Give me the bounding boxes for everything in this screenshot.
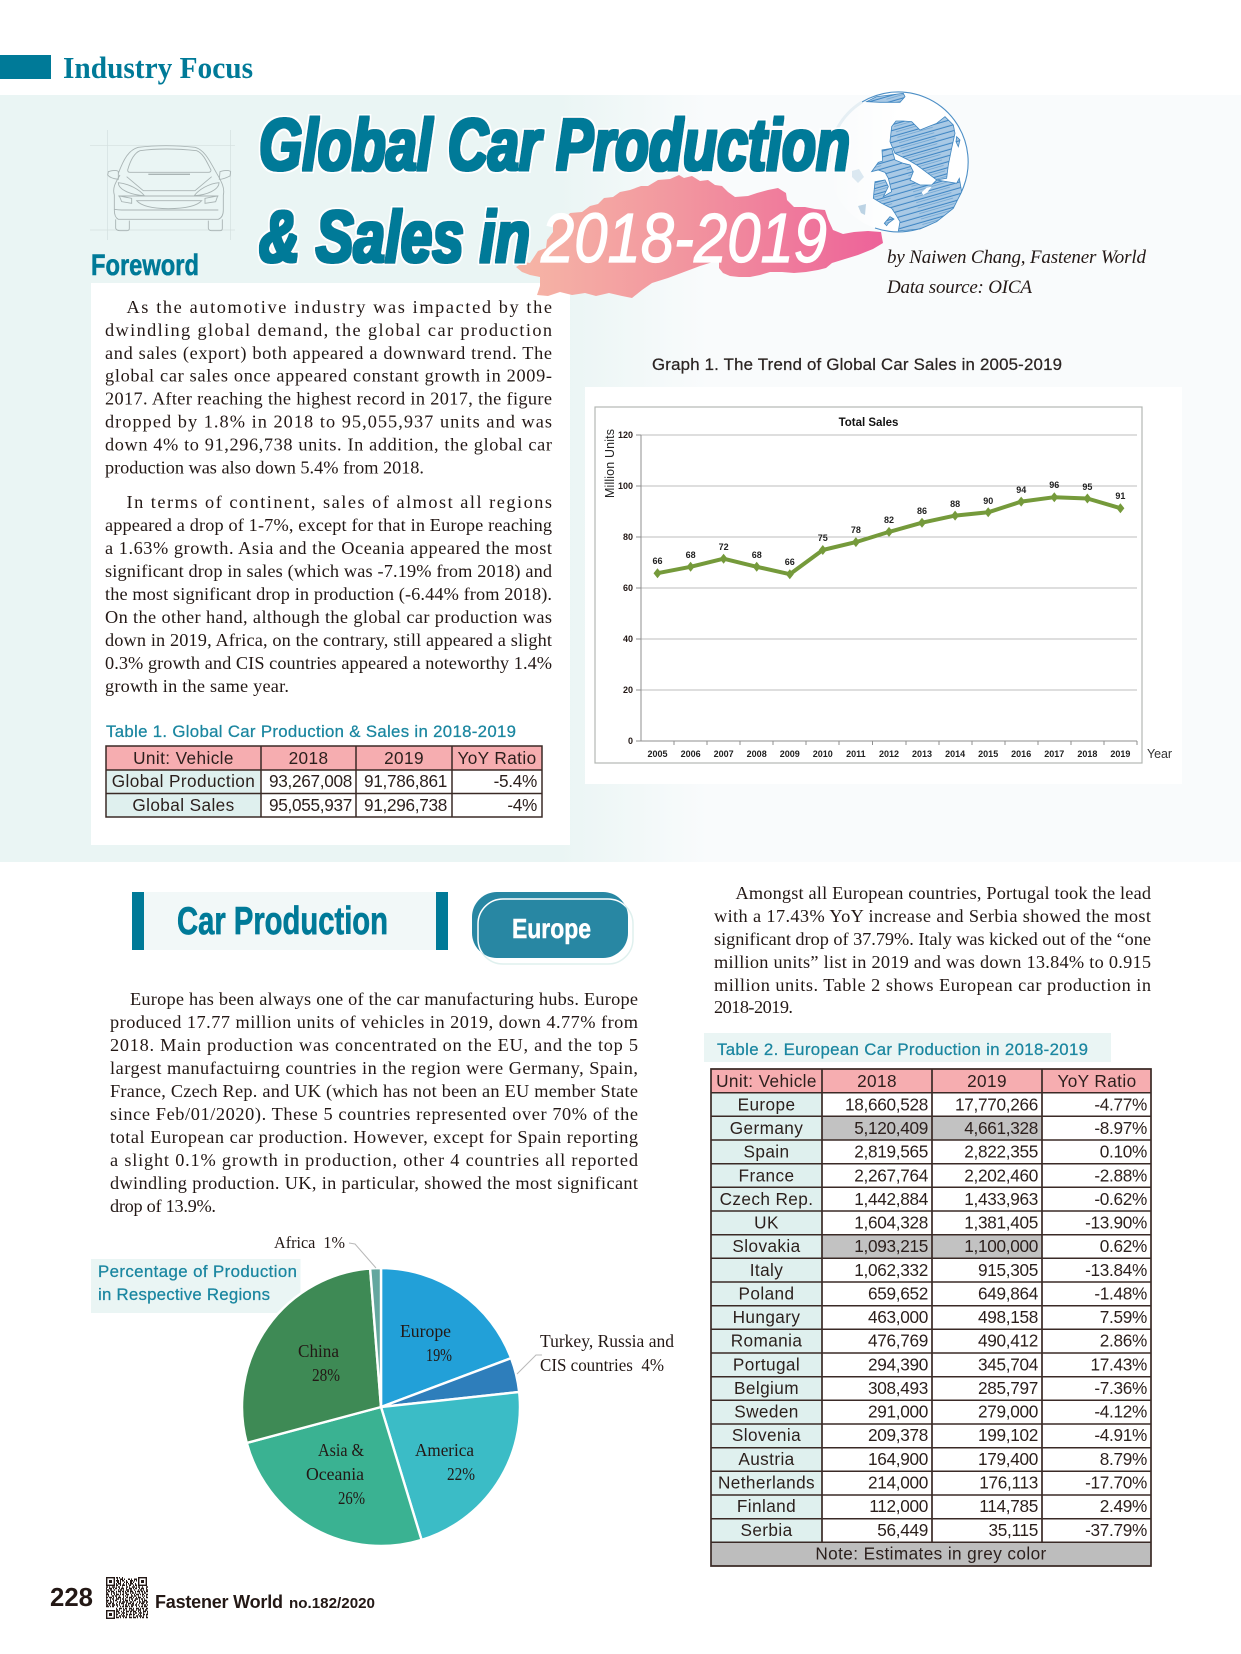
text block: foreword paragraph 1: production was also down 5.4% from 2018. xyxy=(105,457,424,477)
table 2 values: 1,100,000 xyxy=(964,1236,1038,1256)
brush stroke behind years xyxy=(516,175,883,298)
table 2 values: 214,000 xyxy=(868,1472,928,1492)
data labels: 75 xyxy=(818,533,828,543)
data labels: 78 xyxy=(851,525,861,535)
table 2 row labels: Belgium xyxy=(734,1378,799,1398)
table 2 values: -0.62% xyxy=(1094,1189,1147,1209)
table 2 row labels: Note: Estimates in grey color xyxy=(815,1544,1047,1564)
icon: car line drawing xyxy=(90,130,235,240)
x axis labels: 2012 xyxy=(879,749,899,759)
table 2 row labels: 2018 xyxy=(857,1071,897,1091)
table 2 row labels: 2019 xyxy=(967,1071,1007,1091)
slice: America xyxy=(381,1392,520,1540)
table 2 values: 199,102 xyxy=(978,1425,1038,1445)
table 1: 2018 xyxy=(289,748,328,768)
table 2 values: -4.12% xyxy=(1094,1402,1147,1422)
callout: Turkey, Russia and CIS: CIS countries 4% xyxy=(540,1355,664,1375)
table 2 values: 4,661,328 xyxy=(964,1118,1038,1138)
x axis labels: 2014 xyxy=(945,749,965,759)
table 2 row labels: Serbia xyxy=(740,1520,793,1540)
line chart: total sales xyxy=(595,407,1172,763)
slice: China xyxy=(242,1268,381,1443)
table 2 values: 498,158 xyxy=(978,1307,1038,1327)
table 2 values: -17.70% xyxy=(1085,1472,1147,1492)
pie labels: Asia & xyxy=(318,1440,364,1460)
table 2 values: 0.10% xyxy=(1100,1142,1147,1162)
table 2 row labels: Austria xyxy=(738,1449,795,1469)
x axis labels: 2006 xyxy=(681,749,701,759)
byline: Data source: OICA xyxy=(886,277,1032,298)
line chart: total sales: 80 xyxy=(623,532,633,542)
x axis labels xyxy=(647,749,1130,759)
table 1: Global Sales xyxy=(132,795,235,815)
heading: car production: Car Production xyxy=(177,900,388,943)
table 2 row labels xyxy=(716,1071,1137,1564)
callout: Turkey, Russia and CIS xyxy=(517,1331,674,1375)
table 2 values: 291,000 xyxy=(868,1402,928,1422)
byline xyxy=(886,247,1146,298)
pie chart caption: in Respective Regions xyxy=(98,1285,270,1304)
heading: car production xyxy=(132,892,448,950)
line chart: total sales: 40 xyxy=(623,634,633,644)
table 1: 93,267,008 xyxy=(269,771,352,791)
text block: Europe production: 2018. Main production was concentrated on the EU, and the top 5 xyxy=(110,1035,638,1055)
table 1: YoY Ratio xyxy=(457,748,537,768)
text block: Europe production: produced 17.77 million units of vehicles in 2019, down 4.77% from xyxy=(110,1012,638,1032)
table 2 values: 35,115 xyxy=(988,1520,1038,1540)
line chart: total sales: Total Sales xyxy=(839,417,898,429)
table 2 values: 114,785 xyxy=(979,1496,1038,1516)
pie labels: China xyxy=(298,1341,339,1361)
table 1: 2019 xyxy=(384,748,424,768)
table 2 caption: Table 2. European Car Production in 2018-2019 xyxy=(717,1040,1088,1059)
text block: Europe production: a slight 0.1% growth in production, other 4 countries all reported xyxy=(110,1150,638,1170)
table 2 row labels: YoY Ratio xyxy=(1057,1071,1137,1091)
table 2 values: 56,449 xyxy=(877,1520,928,1540)
data labels: 82 xyxy=(884,515,894,525)
table 2 values: 1,093,215 xyxy=(854,1236,928,1256)
text block: Europe production: Europe has been always one of the car manufacturing hubs. Europe xyxy=(130,989,638,1009)
table 2 row labels: UK xyxy=(754,1212,779,1232)
text block: foreword paragraph 2: down in 2019, Africa, on the contrary, still appeared a slight xyxy=(105,630,552,650)
table 1: 95,055,937 xyxy=(269,795,352,815)
table 2 row labels: Germany xyxy=(730,1118,803,1138)
line chart: total sales: 120 xyxy=(618,430,633,440)
text block: foreword paragraph 1: global car sales once appeared constant growth in 2009- xyxy=(105,366,552,386)
table 2 values: 2,819,565 xyxy=(854,1142,928,1162)
table 2 row labels: Sweden xyxy=(734,1402,799,1422)
pie chart: production by region xyxy=(242,1268,520,1546)
text block: European countries: significant drop of 37.79%. Italy was kicked out of the “one xyxy=(714,929,1151,949)
table 2 values: 2,202,460 xyxy=(964,1165,1038,1185)
table 2 row labels: Portugal xyxy=(733,1354,800,1374)
x axis labels: 2016 xyxy=(1011,749,1031,759)
table 2 values: 164,900 xyxy=(868,1449,928,1469)
text block: foreword paragraph 2: On the other hand, although the global car production was xyxy=(105,607,552,627)
data labels: 94 xyxy=(1016,485,1026,495)
title xyxy=(259,105,850,278)
text block: foreword paragraph 2: 0.3% growth and CIS countries appeared a noteworthy 1.4% xyxy=(105,653,552,673)
text block: foreword paragraph 2: the most significant drop in production (-6.44% from 2018). xyxy=(105,584,552,605)
data labels: 68 xyxy=(686,550,696,560)
text block: foreword paragraph 1: As the automotive industry was impacted by the xyxy=(126,297,552,317)
table 1: -5.4% xyxy=(494,771,537,791)
table 2 values: 112,000 xyxy=(869,1496,928,1516)
text block: foreword paragraph 1: 2017. After reaching the highest record in 2017, the figure xyxy=(105,389,552,409)
heading: foreword: Foreword xyxy=(91,249,199,282)
table 2 values: 18,660,528 xyxy=(845,1094,928,1114)
table 2 row labels: Czech Rep. xyxy=(720,1189,813,1209)
table 2 values: 915,305 xyxy=(978,1260,1038,1280)
x axis labels: 2017 xyxy=(1044,749,1064,759)
table 2 values: 1,062,332 xyxy=(854,1260,928,1280)
text block: Europe production: dwindling production. UK, in particular, showed the most significant xyxy=(110,1173,638,1193)
table 2 values: 2,267,764 xyxy=(854,1165,929,1185)
pie labels xyxy=(298,1321,475,1508)
pie chart caption xyxy=(91,1259,300,1313)
data labels: 88 xyxy=(950,499,960,509)
table 1: 91,296,738 xyxy=(364,795,447,815)
line chart: total sales: 0 xyxy=(628,736,633,746)
data line xyxy=(654,492,1124,579)
table 1: Unit: Vehicle xyxy=(133,748,234,768)
title: & Sales in xyxy=(259,197,530,278)
text block: European countries: Amongst all European countries, Portugal took the lead xyxy=(736,883,1151,903)
table 2 caption xyxy=(704,1033,1111,1062)
title years: 2018-2019 xyxy=(540,199,827,277)
data labels: 91 xyxy=(1115,491,1125,501)
table 2 values: -13.84% xyxy=(1085,1260,1147,1280)
table 2 values: 2.49% xyxy=(1100,1496,1147,1516)
pie labels: Oceania xyxy=(306,1464,364,1484)
slice: Turkey, Russia and CIS xyxy=(381,1358,519,1407)
data labels: 72 xyxy=(719,542,729,552)
x axis labels: 2007 xyxy=(714,749,734,759)
table 2 values: 179,400 xyxy=(978,1449,1038,1469)
data labels xyxy=(652,480,1125,567)
table 2 values: 1,433,963 xyxy=(964,1189,1038,1209)
table 2 values: 345,704 xyxy=(978,1354,1039,1374)
x axis labels: 2005 xyxy=(647,749,668,759)
table 2 values: -1.48% xyxy=(1094,1284,1147,1304)
pie labels: Europe xyxy=(400,1321,451,1341)
pie labels: 26% xyxy=(338,1488,365,1508)
data labels: 66 xyxy=(785,557,795,567)
badge: Europe: Europe xyxy=(512,913,591,944)
title: Global Car Production xyxy=(259,105,850,186)
text block: European countries: million units” list in 2019 and was down 13.84% to 0.915 xyxy=(714,952,1151,972)
header background band xyxy=(0,95,1241,862)
table 2 values: 279,000 xyxy=(978,1402,1038,1422)
x axis labels: 2010 xyxy=(813,749,833,759)
page number: 228 xyxy=(50,1582,93,1612)
text block: foreword paragraph 1: and sales (export) both appeared a downward trend. The xyxy=(105,343,552,364)
table 1: -4% xyxy=(507,795,537,815)
table 2 values: 2,822,355 xyxy=(964,1142,1038,1162)
data labels: 96 xyxy=(1049,480,1059,490)
table 2 values xyxy=(845,1094,1147,1540)
table 2 row labels: Europe xyxy=(738,1094,795,1114)
table 2 row labels: Unit: Vehicle xyxy=(716,1071,817,1091)
text block: European countries: million units. Table 2 shows European car production in xyxy=(714,975,1151,995)
table 2 values: 17,770,266 xyxy=(955,1094,1038,1114)
footer: magazine name xyxy=(155,1592,375,1612)
x axis labels: 2011 xyxy=(846,749,866,759)
table 2 values: 308,493 xyxy=(868,1378,928,1398)
table 2 xyxy=(711,1069,1151,1566)
table 1 caption: Table 1. Global Car Production & Sales in 2018-2019 xyxy=(106,722,516,741)
slice: Europe xyxy=(381,1268,511,1407)
text block: Europe production: total European car production. However, except for Spain reporting xyxy=(110,1127,638,1147)
x axis labels: 2013 xyxy=(912,749,932,759)
table 2 values: 294,390 xyxy=(868,1354,928,1374)
slice: Africa xyxy=(370,1268,381,1407)
x axis labels: 2018 xyxy=(1077,749,1097,759)
text block: Europe production: France, Czech Rep. and UK (which has not been an EU member State xyxy=(110,1081,638,1102)
table 2 values: 649,864 xyxy=(978,1284,1039,1304)
table 2 values: 1,604,328 xyxy=(854,1212,928,1232)
callout: Africa: Africa 1% xyxy=(274,1233,345,1252)
table 2 values: 490,412 xyxy=(978,1331,1038,1351)
line chart: total sales: Year xyxy=(1147,747,1172,761)
line chart: total sales: 20 xyxy=(623,685,633,695)
footer: magazine name: Fastener World xyxy=(155,1592,283,1612)
pie labels: 19% xyxy=(426,1345,452,1365)
text block: Europe production xyxy=(110,989,638,1216)
table 2 row labels: Italy xyxy=(750,1260,783,1280)
data labels: 90 xyxy=(983,496,993,506)
table 2 values: 463,000 xyxy=(868,1307,928,1327)
table 2 values: -4.91% xyxy=(1094,1425,1147,1445)
byline: by Naiwen Chang, Fastener World xyxy=(887,247,1146,268)
table 2 values: -2.88% xyxy=(1094,1165,1147,1185)
data labels: 66 xyxy=(652,556,663,566)
table 2 values: 1,442,884 xyxy=(854,1189,929,1209)
text block: foreword paragraph 2 xyxy=(105,492,552,696)
table 2 values: 209,378 xyxy=(868,1425,928,1445)
table 2 values: -7.36% xyxy=(1094,1378,1147,1398)
table 2 values: 476,769 xyxy=(868,1331,928,1351)
text block: foreword paragraph 1: down 4% to 91,296,738 units. In addition, the global car xyxy=(105,434,552,454)
table 2 values: 285,797 xyxy=(978,1378,1038,1398)
table 2 row labels: Slovakia xyxy=(732,1236,801,1256)
table 2 values: 659,652 xyxy=(868,1284,928,1304)
table 2 values: -37.79% xyxy=(1085,1520,1147,1540)
table 2 values: 0.62% xyxy=(1100,1236,1147,1256)
footer: magazine name: no.182/2020 xyxy=(289,1595,375,1612)
pie labels: 28% xyxy=(312,1365,340,1385)
table 2 values: -8.97% xyxy=(1094,1118,1147,1138)
panel: graph background xyxy=(585,387,1182,784)
x axis labels: 2009 xyxy=(780,749,800,759)
table 2 row labels: France xyxy=(739,1165,794,1185)
data labels: 95 xyxy=(1082,482,1092,492)
pie chart caption: Percentage of Production xyxy=(98,1262,297,1281)
table 2 values: 17.43% xyxy=(1090,1354,1147,1374)
x axis labels: 2008 xyxy=(747,749,767,759)
table 2 row labels: Spain xyxy=(744,1142,789,1162)
table 2 values: 176,113 xyxy=(979,1472,1038,1492)
table 2 row labels: Finland xyxy=(737,1496,796,1516)
text block: Europe production: drop of 13.9%. xyxy=(110,1196,216,1216)
x axis labels: 2015 xyxy=(978,749,998,759)
data labels: 86 xyxy=(917,506,927,516)
pie labels: America xyxy=(415,1440,474,1460)
table 2 row labels: Hungary xyxy=(733,1307,800,1327)
text block: European countries xyxy=(714,883,1151,1017)
table 1: Global Production xyxy=(112,771,255,791)
text block: European countries: with a 17.43% YoY increase and Serbia showed the most xyxy=(714,906,1151,926)
table 2 values: 2.86% xyxy=(1100,1331,1147,1351)
text block: Europe production: since Feb/01/2020). These 5 countries represented over 70% of the xyxy=(110,1104,638,1125)
slice: Asia and Oceania xyxy=(247,1407,422,1546)
section marker: Industry Focus: Industry Focus xyxy=(63,50,253,85)
text block: foreword paragraph 2: significant drop in sales (which was -7.19% from 2018) and xyxy=(105,561,552,582)
table 2 row labels: Romania xyxy=(731,1331,802,1351)
table 2 values: 1,381,405 xyxy=(964,1212,1038,1232)
table 2 values: -4.77% xyxy=(1094,1094,1147,1114)
text block: foreword paragraph 2: growth in the same year. xyxy=(105,676,289,696)
text block: Europe production: largest manufactuirng countries in the region were Germany, Spain, xyxy=(110,1058,638,1078)
badge: Europe xyxy=(472,892,633,964)
table 1 xyxy=(106,746,542,817)
text block: foreword paragraph 1: dwindling global demand, the global car production xyxy=(105,320,552,340)
callout: Africa xyxy=(274,1233,376,1268)
table 2 row labels: Netherlands xyxy=(718,1472,815,1492)
table 2 values: 5,120,409 xyxy=(854,1118,928,1138)
line chart: total sales: Million Units xyxy=(603,429,617,498)
text block: European countries: 2018-2019. xyxy=(714,997,793,1017)
table 2 values: 7.59% xyxy=(1100,1307,1147,1327)
text block: foreword paragraph 2: a 1.63% growth. Asia and the Oceania appeared the most xyxy=(105,538,552,558)
table 2 values: 8.79% xyxy=(1100,1449,1147,1469)
callout: Turkey, Russia and CIS: Turkey, Russia and xyxy=(540,1331,674,1351)
table 2 row labels: Slovenia xyxy=(732,1425,801,1445)
pie labels: 22% xyxy=(447,1464,475,1484)
data labels: 68 xyxy=(752,550,762,560)
text block: foreword paragraph 1 xyxy=(105,297,552,477)
text block: foreword paragraph 1: dropped by 1.8% in 2018 to 95,055,937 units and was xyxy=(105,412,552,432)
text block: foreword paragraph 2: appeared a drop of 1-7%, except for that in Europe reaching xyxy=(105,515,552,535)
table 1: 91,786,861 xyxy=(364,771,447,791)
icon: globe xyxy=(828,92,968,232)
graph title: Graph 1. The Trend of Global Car Sales in 2005-2019 xyxy=(652,355,1062,374)
panel: foreword xyxy=(91,283,570,845)
table 2 row labels: Poland xyxy=(739,1284,794,1304)
table 2 values: -13.90% xyxy=(1085,1212,1147,1232)
text block: foreword paragraph 2: In terms of continent, sales of almost all regions xyxy=(126,492,552,512)
line chart: total sales: 60 xyxy=(623,583,633,593)
x axis labels: 2019 xyxy=(1110,749,1130,759)
icon: QR code xyxy=(106,1578,148,1618)
line chart: total sales: 100 xyxy=(618,481,633,491)
